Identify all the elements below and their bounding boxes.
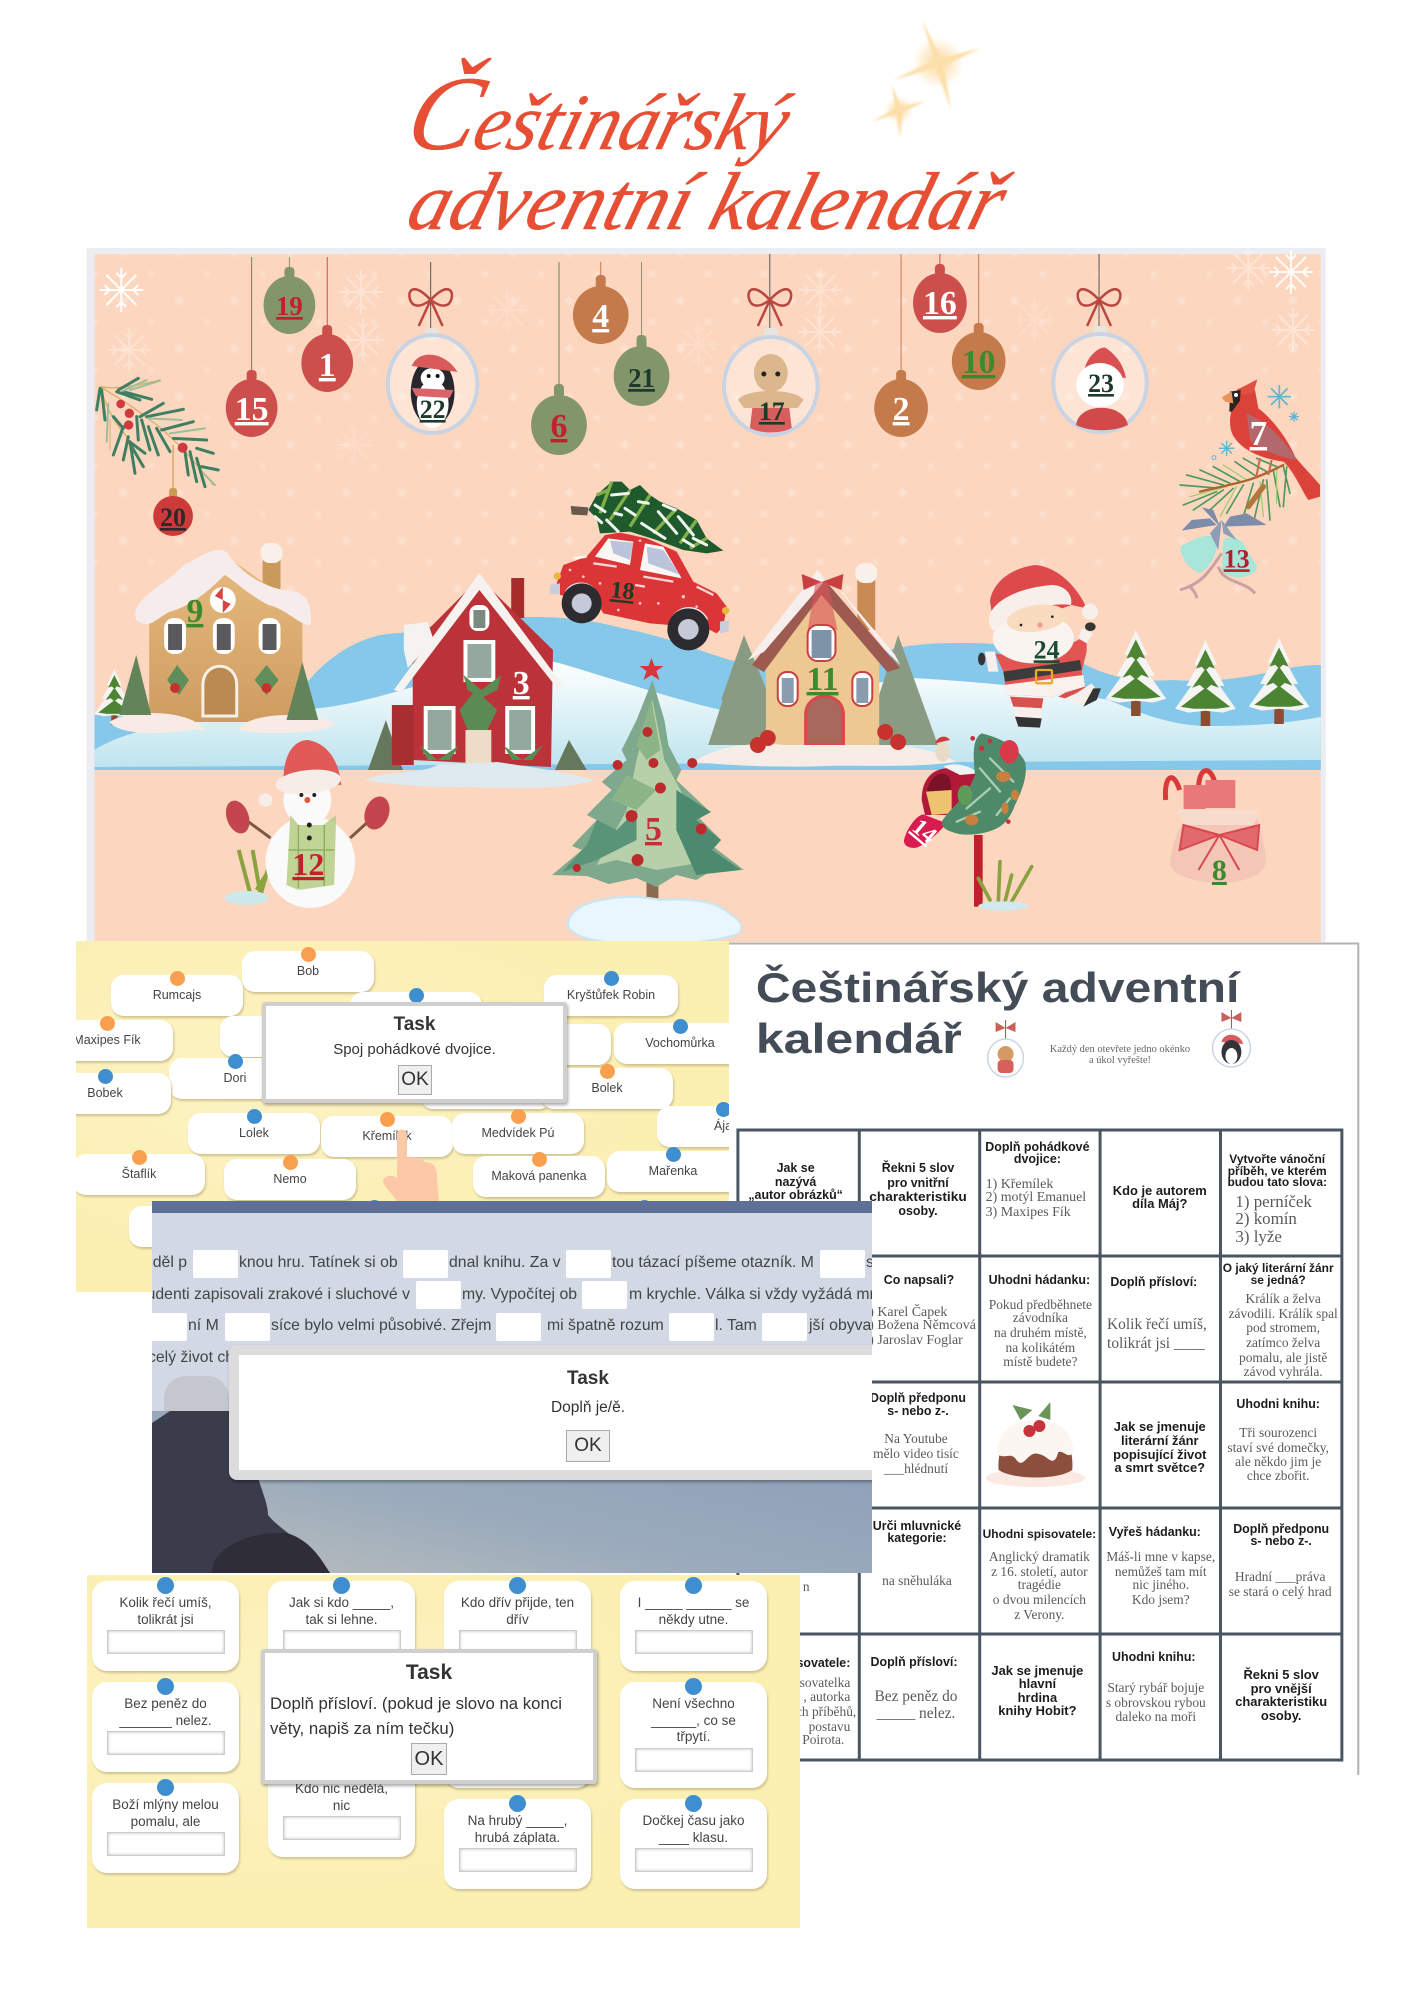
house with bow and number 11 xyxy=(694,563,956,767)
icon: pointing hand xyxy=(383,1130,439,1201)
calendar subtitle: Každý den otevřete jedno okénko xyxy=(1050,1044,1190,1055)
cell text: row 5: charakteristiku xyxy=(1235,1694,1327,1709)
gift bag with number 8 xyxy=(1165,771,1266,887)
card: Mařenka: Mařenka xyxy=(649,1164,697,1178)
cell text: row 4: n xyxy=(803,1579,810,1594)
card: Boží mlýny: pomalu, ale xyxy=(131,1814,200,1828)
card: Bolek: Bolek xyxy=(591,1081,623,1095)
card: Vochomůrka: Vochomůrka xyxy=(645,1036,715,1050)
cell text: row 2: 3) Jaroslav Foglar xyxy=(862,1333,963,1348)
card: Dočkej času xyxy=(620,1799,767,1889)
ornament 19 xyxy=(264,257,315,334)
glass ornament 22 with penguin xyxy=(388,262,477,433)
card: Ája xyxy=(657,1106,789,1147)
icon: gingerbread bauble xyxy=(988,1020,1023,1077)
panel: fill-in exercise with photo xyxy=(152,1201,872,1573)
cell text: row 5: Uhodni spisovatele: xyxy=(732,1656,850,1670)
glass ornament 17 with gingerbread xyxy=(724,254,818,435)
mailbox: 14 xyxy=(907,814,942,849)
post and grass xyxy=(974,835,1032,911)
santa legs xyxy=(1010,683,1101,728)
card: Kolik řečí umíš: Kolik řečí umíš, xyxy=(119,1595,212,1610)
ornament 15 xyxy=(226,257,277,437)
card: I ... se někdy utne: někdy utne. xyxy=(659,1612,728,1626)
card: Bez peněz do: Bez peněz do xyxy=(124,1696,207,1711)
card: hidden blue xyxy=(350,992,482,1033)
cell text: row 5: Jak se jmenuje xyxy=(991,1663,1083,1678)
dialog: Doplň přísloví: Task xyxy=(406,1661,452,1684)
card: hidden column 2 xyxy=(268,1682,415,1772)
gingerbread house with number 9 xyxy=(109,543,336,733)
house with bow and number 11: 11 xyxy=(807,661,839,698)
pine tree row xyxy=(1105,630,1309,726)
cell text: row 3: ale někdo jim je xyxy=(1235,1454,1321,1469)
cell text: row 2: 2) Božena Němcová xyxy=(862,1318,976,1333)
calendar heading xyxy=(756,963,1241,1062)
header bar xyxy=(152,1201,872,1213)
cell text: row 4: Hradní ___práva xyxy=(1235,1569,1325,1584)
cell text: row 5: s obrovskou rybou xyxy=(1106,1695,1206,1710)
cell text: row 2 xyxy=(862,1261,1338,1379)
number 18: 18 xyxy=(609,577,636,605)
cell text: row 5: hrdina xyxy=(1018,1690,1058,1705)
cell text: row 1: „autor obrázků“ xyxy=(748,1188,843,1202)
cell text: row 4: nic jiného. xyxy=(1132,1577,1189,1592)
cell text: row 3: chce zbořit. xyxy=(1247,1468,1309,1483)
dialog: Doplň je/ě xyxy=(229,1345,889,1480)
cell text: row 1: Doplň pohádkové xyxy=(985,1140,1090,1154)
title line 2: adventní kalendář xyxy=(399,156,1019,245)
calendar subtitle: a úkol vyřešte! xyxy=(1089,1055,1151,1066)
cell text: row 1: Jak se xyxy=(777,1161,815,1175)
card: Štaflík xyxy=(73,1154,205,1195)
ornament 20 xyxy=(153,445,193,536)
cell text: row 1: nazývá xyxy=(775,1175,816,1189)
cell text: row 5: Anglická spisovatelka xyxy=(731,1675,850,1690)
gift bag with number 8: 8 xyxy=(1212,854,1227,887)
cell text: row 1: dvojice: xyxy=(1014,1152,1061,1166)
cell text: row 2: Králík a želva xyxy=(1246,1291,1321,1306)
ornament 21 xyxy=(614,262,669,406)
cell text: row 5: Doplň přísloví: xyxy=(871,1655,958,1669)
mailbox xyxy=(904,764,983,849)
cell text: row 5: Řekni 5 slov xyxy=(1243,1667,1320,1682)
cell text: row 3: staví své domečky, xyxy=(1227,1440,1329,1455)
icon: penguin bauble xyxy=(1213,1010,1250,1067)
panel: advent scene xyxy=(86,248,1326,942)
car body xyxy=(550,533,729,650)
cell text: row 4: tragédie xyxy=(1018,1577,1061,1592)
card: Vochomůrka xyxy=(614,1023,746,1064)
calendar grid xyxy=(738,1130,1342,1760)
dialog: Doplň přísloví xyxy=(261,1649,597,1784)
exercise text line 1: tou tázací píšeme otazník. M xyxy=(612,1254,814,1271)
card: Není všechno: třpytí. xyxy=(677,1729,710,1744)
cell text: row 4: Anglický dramatik xyxy=(989,1549,1090,1564)
panel: matching game xyxy=(76,941,729,1292)
cell text: row 4: na sněhuláka xyxy=(882,1573,952,1588)
cell text: row 3: a smrt světce? xyxy=(1115,1460,1205,1475)
card: Jak si kdo: Jak si kdo _____, xyxy=(289,1595,394,1610)
card: lower right xyxy=(578,1204,710,1245)
ornament 20: 20 xyxy=(160,503,186,532)
title line 1: Češtinářský xyxy=(395,56,807,173)
snow hills xyxy=(94,661,1321,767)
icon: small golden star xyxy=(872,85,926,138)
ornament 15: 15 xyxy=(235,391,269,428)
card: Rumcajs: Rumcajs xyxy=(153,988,201,1002)
cell text: row 4: nemůžeš tam mít xyxy=(1115,1564,1207,1579)
card: hidden left xyxy=(220,1016,352,1057)
ornament 4: 4 xyxy=(592,298,609,335)
cell text: row 1: 2) komín xyxy=(1235,1209,1297,1228)
cell text: row 5: osoby. xyxy=(1261,1708,1302,1723)
wreath xyxy=(935,733,1026,835)
snowman with number 12 xyxy=(222,740,394,908)
blue hills xyxy=(94,617,1321,770)
gingerbread house with number 9: 9 xyxy=(186,593,203,630)
cell text: row 5: _____ nelez. xyxy=(876,1705,955,1722)
card: Rumcajs xyxy=(111,975,243,1016)
card: Křemílek: Křemílek xyxy=(362,1129,412,1143)
santa with number 24 xyxy=(978,565,1101,728)
icon: christmas pudding xyxy=(986,1402,1085,1487)
red house with number 3 xyxy=(365,573,595,788)
card: Bob xyxy=(242,951,374,992)
dialog: Doplň je/ě: Task xyxy=(567,1368,609,1389)
card: Bob: Bob xyxy=(297,964,319,978)
blue snowflakes xyxy=(1212,385,1299,460)
pine branch with berries, left xyxy=(97,378,218,487)
ornament 10: 10 xyxy=(962,344,996,381)
cell text: row 2: Uhodni hádanku: xyxy=(989,1273,1090,1287)
cell text: row 5: postavu xyxy=(809,1719,851,1734)
card: Nemo: Nemo xyxy=(273,1172,307,1186)
cell text: row 4 xyxy=(803,1519,1332,1622)
grey cloud shape xyxy=(164,1376,229,1411)
cell text: row 3: s- nebo z-. xyxy=(887,1404,949,1418)
mailbox with wreath and number 14 xyxy=(904,733,1032,911)
cell text: row 1: 1) Křemílek xyxy=(986,1177,1053,1192)
frame band xyxy=(87,248,1326,948)
exercise background xyxy=(152,1213,872,1411)
scene backdrop and ornaments xyxy=(87,246,1326,948)
tree on roof xyxy=(571,482,723,553)
card: Dočkej času: ____ klasu. xyxy=(659,1830,728,1844)
cell text: row 1: budou tato slova: xyxy=(1227,1175,1327,1189)
card: Maková panenka: Maková panenka xyxy=(491,1169,587,1183)
ornament 6 xyxy=(531,262,587,455)
cell text: row 5: Uhodni knihu: xyxy=(1112,1650,1196,1664)
exercise text line 1: knou hru. Tatínek si ob xyxy=(239,1254,398,1271)
card: Mařenka xyxy=(607,1151,739,1192)
ornament 16 xyxy=(913,254,967,333)
card: hidden right xyxy=(479,1024,611,1065)
dialog: Doplň přísloví: věty, napiš za ním tečku) xyxy=(270,1719,454,1738)
snow mound under tree xyxy=(568,897,741,944)
card: Kdo nic nedělá: Kdo nic nedělá, xyxy=(295,1781,388,1796)
cell text: row 3: Uhodni knihu: xyxy=(1236,1397,1320,1411)
card: Maková panenka xyxy=(473,1156,605,1197)
cell text: row 4: z Verony. xyxy=(1014,1607,1065,1622)
card: hidden column 3 xyxy=(444,1682,591,1788)
bells and holly xyxy=(1180,507,1267,598)
card: Na hrubý: hrubá záplata. xyxy=(475,1830,560,1844)
cell text: row 4: Vyřeš hádanku: xyxy=(1109,1525,1201,1539)
red house with number 3: 3 xyxy=(513,665,530,702)
dialog: Spoj pohádkové dvojice: Spoj pohádkové dvojice. xyxy=(333,1041,496,1058)
card: Jak si kdo: tak si lehne. xyxy=(305,1612,378,1626)
card: Kdo dřív přijde: dřív xyxy=(506,1612,529,1626)
ornament 10 xyxy=(952,254,1006,390)
card: Dočkej času: Dočkej času jako xyxy=(642,1813,745,1828)
cell text: row 3: Jak se jmenuje xyxy=(1114,1419,1206,1434)
calendar subtitle xyxy=(1050,1044,1190,1066)
cell text: row 2: místě budete? xyxy=(1003,1354,1077,1369)
cell text: row 1 xyxy=(748,1140,1327,1246)
santa body xyxy=(978,622,1096,697)
snowman with number 12: 12 xyxy=(292,847,324,882)
cardinal bird xyxy=(1222,379,1320,500)
panel: proverbs game xyxy=(87,1575,800,1928)
card: Maxipes Fík xyxy=(41,1020,173,1061)
ornament 16: 16 xyxy=(923,285,957,322)
santa head xyxy=(989,565,1098,663)
peach background xyxy=(94,246,1321,944)
card: I ... se někdy utne xyxy=(620,1581,767,1671)
pine branch under cardinal xyxy=(1180,458,1290,523)
cell text: row 4: Doplň předponu xyxy=(1233,1522,1329,1536)
cell text: row 5: Starý rybář bojuje xyxy=(1107,1680,1204,1695)
pine, far left xyxy=(94,669,134,725)
cell text: row 3: popisující život xyxy=(1113,1447,1207,1462)
christmas tree with number 5 xyxy=(552,658,744,905)
card: Na hrubý: Na hrubý _____, xyxy=(468,1813,567,1828)
cell text: row 5: , autorka xyxy=(803,1689,850,1704)
card: hidden centre xyxy=(420,1068,552,1109)
cell text: row 2: Co napsali? xyxy=(884,1273,954,1287)
ornament 4 xyxy=(573,262,629,344)
cell text: row 1: charakteristiku xyxy=(869,1190,967,1204)
cell text: row 1: Řekni 5 slov xyxy=(882,1160,954,1175)
title: Češtinářský adventní kalendář xyxy=(395,22,1019,245)
cell text: row 4: Urči mluvnické xyxy=(873,1519,961,1533)
cell text: row 1: 3) lyže xyxy=(1235,1227,1282,1246)
card: Dori: Dori xyxy=(224,1071,246,1085)
cell text: row 4: Kdo jsem? xyxy=(1132,1592,1190,1607)
glass ornament 17 with gingerbread: 17 xyxy=(759,397,785,426)
cell text: row 3: Na Youtube xyxy=(884,1431,948,1446)
foreground scene group xyxy=(222,630,1309,944)
cell text: row 5: detektivních příběhů, xyxy=(742,1704,856,1719)
card: Není všechno: ______, co se xyxy=(651,1712,736,1728)
calendar heading: kalendář xyxy=(756,1015,963,1062)
cell text: row 4: Uhodni spisovatele: xyxy=(983,1527,1096,1541)
cell text: row 2: 1) Karel Čapek xyxy=(862,1303,947,1320)
cell text: row 2: Pokud předběhnete xyxy=(989,1297,1092,1312)
ornament 6: 6 xyxy=(551,408,567,445)
card: Kolik řečí umíš: tolikrát jsi xyxy=(137,1612,194,1626)
card: Bez peněz do: _______ nelez. xyxy=(119,1712,212,1728)
cell text: row 1: Vytvořte vánoční xyxy=(1229,1152,1326,1166)
card: Jak si kdo xyxy=(268,1581,415,1671)
exercise text line 2 xyxy=(152,1281,872,1309)
cell text: row 2: se jedná? xyxy=(1251,1273,1306,1287)
card: Kryštůfek Robin: Kryštůfek Robin xyxy=(567,988,655,1002)
christmas tree with number 5: 5 xyxy=(645,811,662,848)
cell text: row 5: pro vnější xyxy=(1251,1681,1312,1696)
cell text: row 5: daleko na moři xyxy=(1116,1709,1196,1724)
exercise text line 2: my. Vypočítej ob xyxy=(462,1286,577,1303)
ornament 21: 21 xyxy=(628,363,655,393)
exercise text line 1: dnal knihu. Za v xyxy=(449,1254,561,1271)
card: Medvídek Pú xyxy=(452,1113,584,1154)
exercise text line 3: l. Tam xyxy=(715,1317,757,1334)
dialog: Spoj pohádkové dvojice xyxy=(262,1002,567,1103)
exercise text line 3 xyxy=(152,1313,872,1341)
photo sky and rock xyxy=(152,1411,872,1573)
cell text: row 3 xyxy=(870,1391,1329,1483)
card: Boží mlýny: Boží mlýny melou xyxy=(112,1797,219,1812)
cell text: row 4: z 16. století, autor xyxy=(991,1564,1088,1579)
card: Bolek xyxy=(541,1068,673,1109)
icon: large golden star xyxy=(893,20,981,110)
card: I ... se někdy utne: I _____ ______ se xyxy=(638,1595,749,1610)
cell text: row 1: příběh, ve kterém xyxy=(1228,1164,1327,1178)
cell text: row 1: díla Máj? xyxy=(1132,1196,1188,1211)
cell text: row 1: 2) motýl Emanuel xyxy=(986,1190,1086,1205)
dialog: Doplň je/ě: OK xyxy=(574,1435,602,1456)
dialog: Doplň přísloví: OK xyxy=(415,1748,443,1770)
left village xyxy=(94,543,595,788)
card: Bobek: Bobek xyxy=(87,1086,123,1100)
cell text: row 2: na kolikátém xyxy=(1006,1340,1076,1355)
card: Kdo nic nedělá xyxy=(268,1767,415,1857)
ornament 2 xyxy=(874,254,928,437)
number 13: 13 xyxy=(1224,544,1250,573)
cell text: row 1: pro vnitřní xyxy=(887,1176,949,1190)
card: Nemo xyxy=(224,1159,356,1200)
exercise text line 3: síce bylo velmi působivé. Zřejm xyxy=(271,1317,491,1334)
card: Není všechno: Není všechno xyxy=(652,1696,735,1711)
cell text: row 3: mělo video tisíc xyxy=(873,1446,959,1461)
exercise text line 3: mi špatně rozum xyxy=(547,1317,664,1334)
cell text: row 2: tolikrát jsi ____ xyxy=(1107,1335,1205,1352)
cell text: row 4: kategorie: xyxy=(887,1531,947,1545)
number 24: 24 xyxy=(1034,635,1060,664)
card: Kdo dřív přijde: Kdo dřív přijde, ten xyxy=(461,1595,574,1610)
cell text: row 4: Máš-li mne v kapse, xyxy=(1106,1549,1215,1564)
ornament 2: 2 xyxy=(893,391,910,428)
cell text: row 2: Kolik řečí umíš, xyxy=(1107,1316,1207,1333)
card: Bez peněz do xyxy=(92,1682,239,1772)
cell text: row 2: O jaký literární žánr xyxy=(1223,1261,1334,1275)
cell text: row 2: závodníka xyxy=(1013,1310,1068,1325)
cell text: row 5: hlavní xyxy=(1019,1676,1056,1691)
dialog: Doplň je/ě: Doplň je/ě. xyxy=(551,1399,625,1416)
glass ornament 23 with santa xyxy=(1053,254,1147,432)
card: Medvídek Pú: Medvídek Pú xyxy=(482,1126,554,1140)
panel: calendar sheet xyxy=(729,942,1360,1775)
cell text: row 2: pod stromem, xyxy=(1246,1320,1320,1335)
card: Křemílek xyxy=(321,1116,453,1157)
cell text: row 5: knihy Hobit? xyxy=(998,1703,1077,1718)
card: Kdo dřív přijde xyxy=(444,1581,591,1671)
card: Kolik řečí umíš xyxy=(92,1581,239,1671)
card: Bobek xyxy=(39,1073,171,1114)
card: Na hrubý xyxy=(444,1799,591,1889)
cell text: row 2: na druhém místě, xyxy=(994,1325,1087,1340)
cell text: row 3: Doplň předponu xyxy=(870,1391,966,1405)
cardinal, pine and bells group xyxy=(1180,379,1320,598)
card: Kryštůfek Robin xyxy=(544,975,678,1016)
ornament 1 xyxy=(301,257,353,392)
number 7: 7 xyxy=(1250,414,1267,453)
cell text: row 5: Bez peněz do xyxy=(875,1688,958,1705)
card: Lolek xyxy=(188,1113,320,1154)
cell text: row 4: s- nebo z-. xyxy=(1250,1534,1312,1548)
exercise text line 3: ní M xyxy=(188,1317,219,1334)
cell text: row 1: osoby. xyxy=(898,1204,938,1218)
cell text: row 2: závodili. Králík spal xyxy=(1229,1306,1338,1321)
card: Není všechno xyxy=(620,1682,767,1788)
card: lower left xyxy=(129,1206,261,1247)
glass ornament 22 with penguin: 22 xyxy=(420,395,446,424)
card: Dori xyxy=(169,1058,301,1099)
car with tree and number 18 xyxy=(550,482,729,650)
card: Lolek: Lolek xyxy=(239,1126,269,1140)
glass ornament 23 with santa: 23 xyxy=(1088,369,1114,398)
cell text: row 1: 1) perníček xyxy=(1235,1192,1312,1211)
cell text: row 1: Kdo je autorem xyxy=(1113,1183,1207,1198)
exercise text line 2: m krychle. Válka si vždy vyžádá mn xyxy=(629,1286,872,1303)
calendar heading: Češtinářský adventní xyxy=(756,963,1241,1011)
cell text: row 5 xyxy=(731,1650,1327,1747)
cell text: row 3: Tři sourozenci xyxy=(1239,1425,1317,1440)
ornament 1: 1 xyxy=(319,347,336,384)
cell text: row 2: Doplň přísloví: xyxy=(1110,1275,1197,1289)
ornament 19: 19 xyxy=(276,291,303,321)
cell text: row 2: pomalu, ale jistě xyxy=(1239,1350,1327,1365)
cell text: row 4: se stará o celý hrad xyxy=(1229,1584,1332,1599)
card: Štaflík: Štaflík xyxy=(122,1167,156,1181)
dialog: Spoj pohádkové dvojice: OK xyxy=(401,1069,429,1090)
cell text: row 3: literární žánr xyxy=(1121,1433,1199,1448)
cell text: row 3: ___hlédnutí xyxy=(883,1461,948,1476)
card: lower centre xyxy=(308,1204,440,1245)
cell text: row 2: závod vyhrála. xyxy=(1244,1364,1323,1379)
exercise text line 1 xyxy=(152,1250,872,1278)
cell text: row 5: Poirota. xyxy=(802,1732,844,1747)
cell text: row 1: 3) Maxipes Fík xyxy=(986,1205,1071,1220)
card: Boží mlýny xyxy=(92,1783,239,1873)
dialog: Spoj pohádkové dvojice: Task xyxy=(394,1014,435,1035)
dialog: Doplň přísloví: Doplň přísloví. (pokud je slovo na konci xyxy=(270,1694,562,1713)
cell text: row 2: zatímco želva xyxy=(1246,1335,1320,1350)
cell text: row 4: o dvou milencích xyxy=(993,1592,1086,1607)
card: Kdo nic nedělá: nic xyxy=(333,1798,350,1812)
